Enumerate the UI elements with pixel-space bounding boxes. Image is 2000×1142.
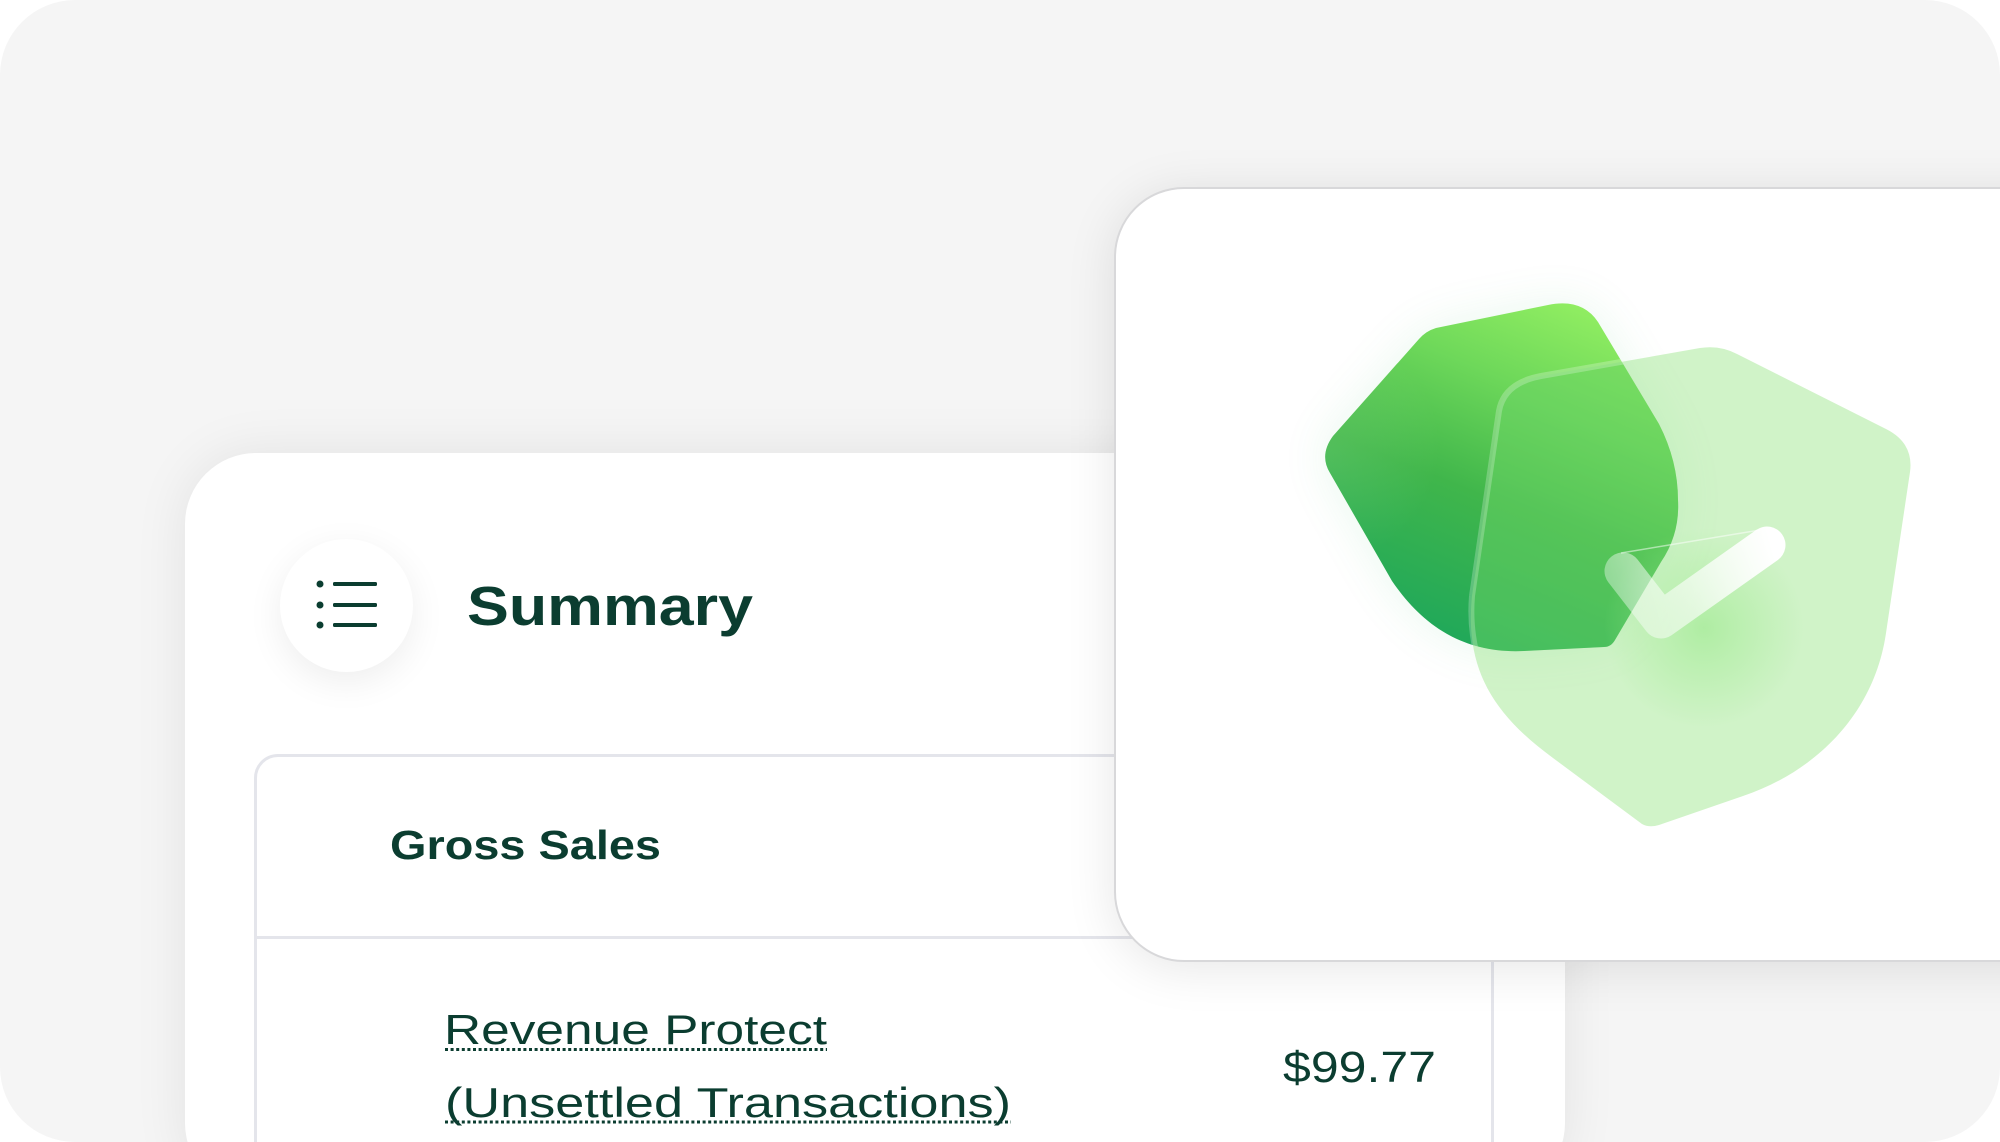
table outline [254,754,1494,1142]
panel: summary card [185,453,1565,1142]
checkmark [1621,530,1767,620]
light green shield [1468,347,1910,826]
dark green shield [1310,300,1678,651]
icon circle [280,539,413,672]
table row divider [254,936,1494,939]
row label: Gross Sales: Gross Sales [390,822,661,868]
row label: Revenue Protect [444,1006,1011,1126]
row label: Revenue Protect: Revenue Protect [444,1006,827,1053]
dark shield glow [1325,303,1678,651]
row label: Revenue Protect: (Unsettled Transactions) [445,1079,1011,1126]
icon: list [316,580,377,628]
icon: overlapping shields with check [1325,300,1910,826]
heading: Summary: Summary [467,575,753,637]
row value: $99.77: $99.77 [1283,1043,1436,1092]
panel: shield card [1114,187,2000,962]
